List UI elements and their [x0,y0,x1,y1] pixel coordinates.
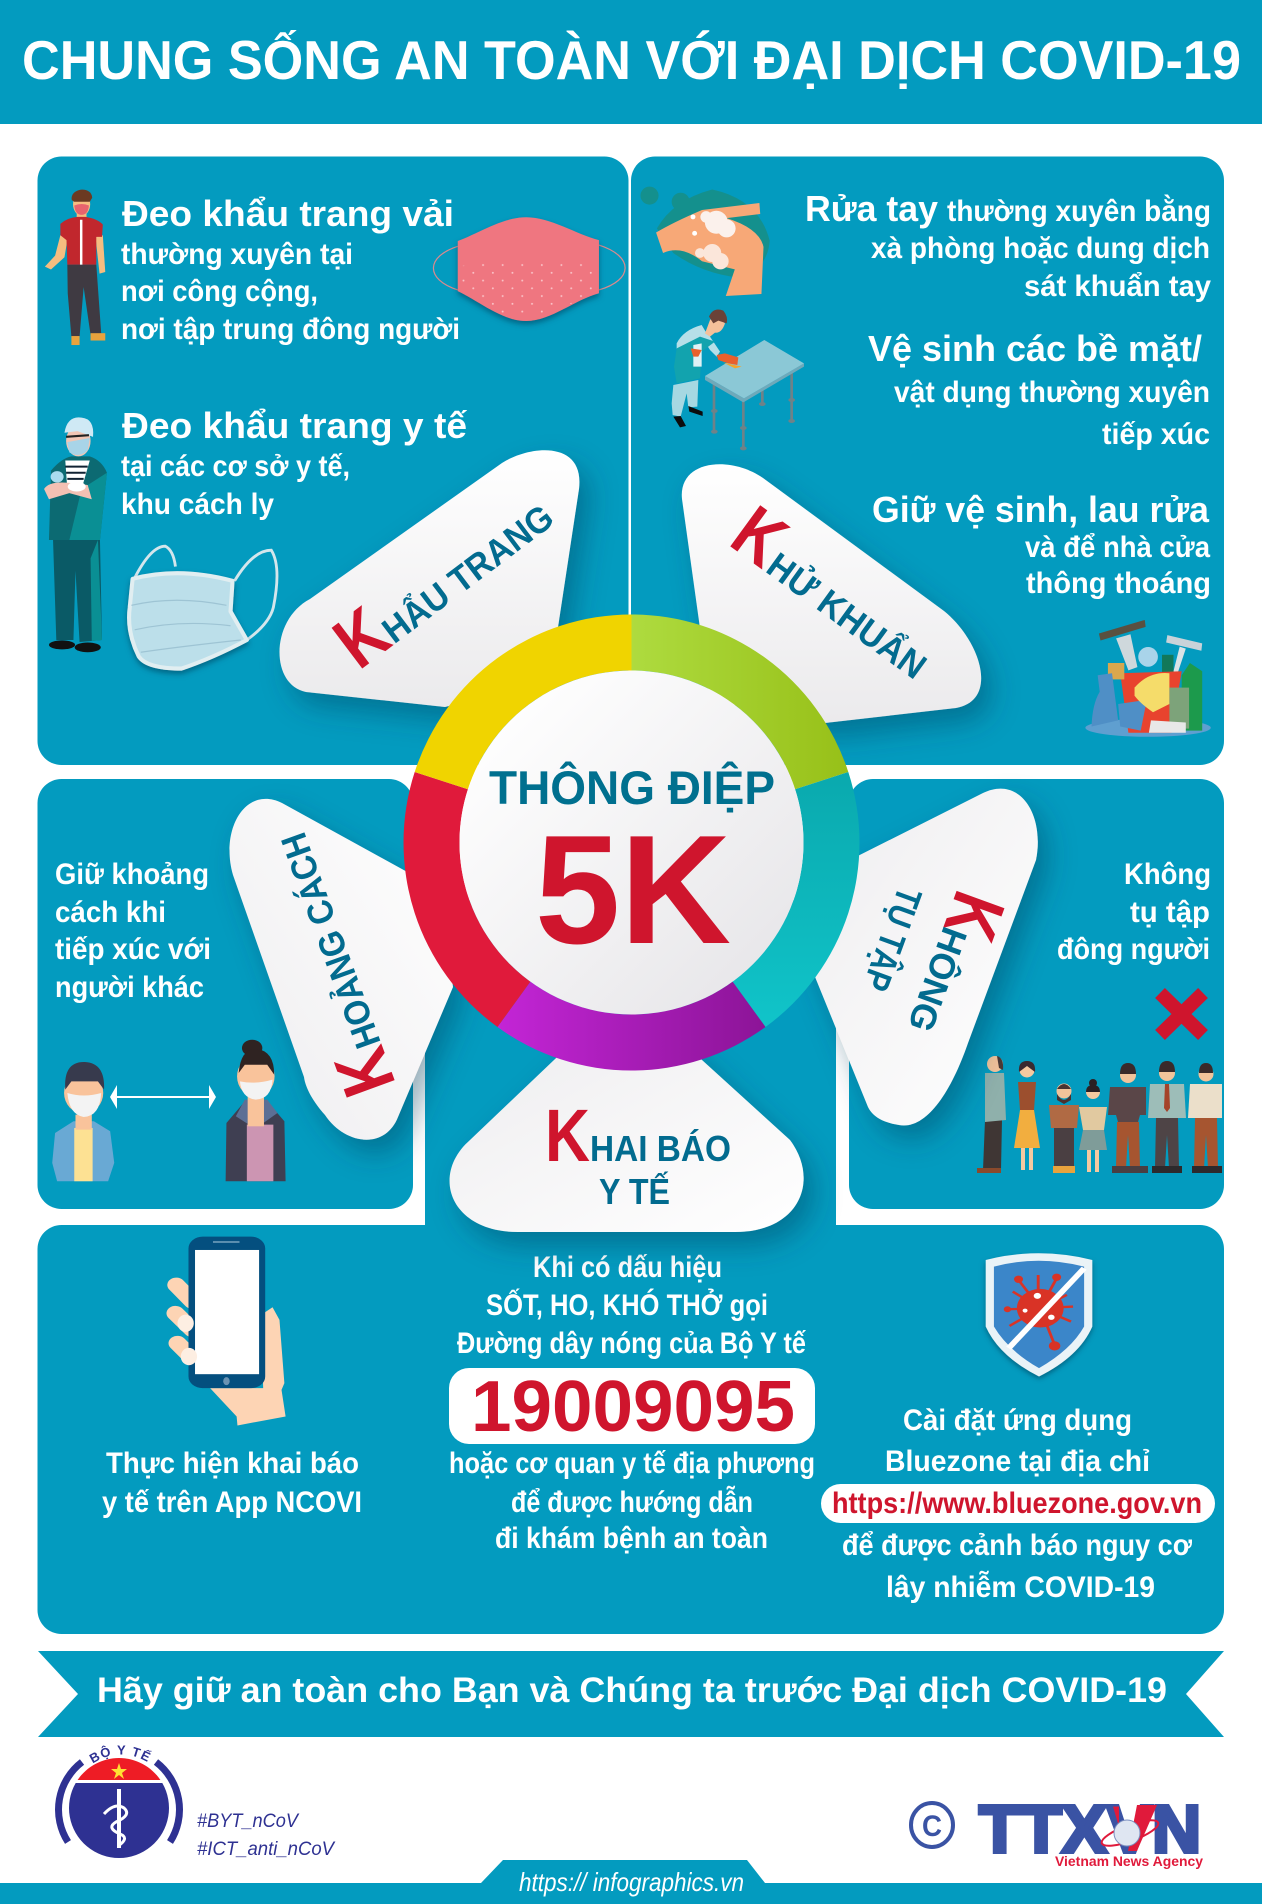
logo: TTXVN: TTXVN [979,1792,1201,1867]
label: khai bao y te: HAI BÁO [590,1128,731,1169]
label: khau trang: K [319,591,404,684]
text: vai line 3: nơi tập trung đông người [121,313,460,346]
label: khong tu tap: TỤ TẬP [855,882,931,997]
label: khong tu tap: HÔNG [900,922,976,1038]
label: khu khuan [718,490,954,693]
hotline number: 19009095 [471,1367,795,1447]
label: khong tu tap: K [928,882,1021,951]
text: hotline intro 3: Đường dây nóng của Bộ Y tế [457,1327,806,1360]
icon: cleaning supplies [1085,620,1211,737]
text: bluezone line 1: Cài đặt ứng dụng [903,1404,1132,1437]
text: hotline note 1: hoặc cơ quan y tế địa phương [449,1447,815,1480]
text: rua tay heading: Rửa tay [805,188,938,229]
logo: copyright [911,1803,953,1847]
logo: TTXVN: Vietnam News Agency [1055,1854,1204,1869]
icon: person with mask right [226,1040,286,1181]
label: khau trang: HẨU TRANG [374,495,561,651]
label: khong tu tap [847,865,1021,1049]
text: vai line 2: nơi công cộng, [121,275,318,308]
text: bluezone line 3: để được cảnh báo nguy cơ [842,1529,1193,1562]
petal: khu khuan [682,464,981,723]
footer band [0,1860,1262,1904]
text: ve sinh line 1: vật dụng thường xuyên [894,376,1210,409]
text: lau rua line 1: và để nhà cửa [1025,531,1210,564]
panel: khai bao [38,900,1224,1634]
text: hotline intro 2: SỐT, HO, KHÓ THỞ gọi [486,1288,768,1322]
panel: khau trang [38,156,628,765]
text: hotline note 2: để được hướng dẫn [511,1485,753,1519]
icon: cleaner at table [672,310,804,450]
logo: bo y te [55,1746,183,1858]
label: khoang cach [241,825,411,1107]
ribbon banner: Hãy giữ an toàn cho Bạn và Chúng ta trước Đại dịch COVID-19 [97,1671,1167,1710]
text: line 2: tụ tập [1130,896,1210,929]
text: hotline intro 1: Khi có dấu hiệu [533,1251,722,1284]
petal: khong tu tap [800,789,1038,1125]
text: hashtag BYT: #BYT_nCoV [197,1811,300,1832]
text: app line 1: Thực hiện khai báo [106,1447,359,1480]
panel: khong tu tap [849,779,1224,1209]
text: line 1: Không [1124,858,1211,891]
label: khai bao y te: K [545,1094,590,1177]
petal: khai bao y te [450,1040,804,1232]
logo: bo y te: BỘ Y TẾ [89,1746,152,1764]
text: vai line 1: thường xuyên tại [121,238,353,271]
icon: hand washing [640,187,770,296]
label: khoang cach: K [318,1037,411,1107]
text: line 3: tiếp xúc với [55,933,211,966]
text: ve sinh heading: Vệ sinh các bề mặt/ [868,328,1202,369]
icon: group of people [977,1056,1222,1173]
text: line 2: cách khi [55,896,166,929]
text: lau rua line 2: thông thoáng [1026,567,1211,600]
panel: khu khuan [631,156,1224,765]
text: ve sinh line 2: tiếp xúc [1102,418,1210,451]
text: y te line 2: khu cách ly [121,488,274,521]
petal: khoang cach [230,799,453,1140]
icon: medical mask [129,546,277,669]
panel: khoang cach [38,779,413,1209]
label: khu khuan: HỬ KHUẨN [760,544,935,687]
text: y te heading: Đeo khẩu trang y tế [122,405,468,446]
icon: bluezone shield [986,1253,1092,1377]
logo: copyright: C [922,1810,942,1843]
text: line 3: đông người [1057,933,1210,966]
text: rua tay line 3: sát khuẩn tay [1024,270,1211,303]
center disc [460,670,804,1014]
icon: doctor [44,417,107,652]
text: line 1: Giữ khoảng [55,858,209,891]
label: khu khuan: K [718,490,802,583]
text: app line 2: y tế trên App NCOVI [102,1486,362,1519]
title band [0,0,1262,124]
text: lau rua heading: Giữ vệ sinh, lau rửa [872,489,1210,530]
text: vai heading: Đeo khẩu trang vải [122,193,454,234]
text: rua tay line 1: thường xuyên bằng [947,194,1211,228]
text: hashtag ICT: #ICT_anti_nCoV [197,1839,336,1860]
center ring [404,614,859,1071]
text: thong diep: THÔNG ĐIỆP [489,761,775,814]
ribbon banner [38,1651,1224,1737]
icon: man in red shirt [45,190,105,345]
text: rua tay line 2: xà phòng hoặc dung dịch [871,232,1210,265]
icon: person with mask left [52,1062,114,1181]
text: 5K: 5K [535,803,731,976]
label: khau trang [319,469,566,684]
icon: red cross [1160,993,1203,1035]
label: khai bao y te: Y TẾ [599,1171,670,1212]
text: bluezone line 2: Bluezone tại địa chỉ [885,1445,1150,1478]
label: khoang cach: HOẢNG CÁCH [273,828,388,1054]
text: bluezone line 4: lây nhiễm COVID-19 [886,1570,1155,1604]
bluezone url: https://www.bluezone.gov.vn [832,1487,1202,1520]
text: line 4: người khác [55,971,204,1004]
text: footer url: https:// infographics.vn [519,1867,744,1897]
label: khai bao y te [545,1094,731,1212]
petal: khau trang [279,450,579,707]
icon: distance arrow [110,1085,216,1109]
text: y te line 1: tại các cơ sở y tế, [121,450,350,483]
icon: phone in hand [175,1237,286,1425]
text: hotline note 3: đi khám bệnh an toàn [495,1522,768,1555]
icon: cloth mask [433,217,625,321]
